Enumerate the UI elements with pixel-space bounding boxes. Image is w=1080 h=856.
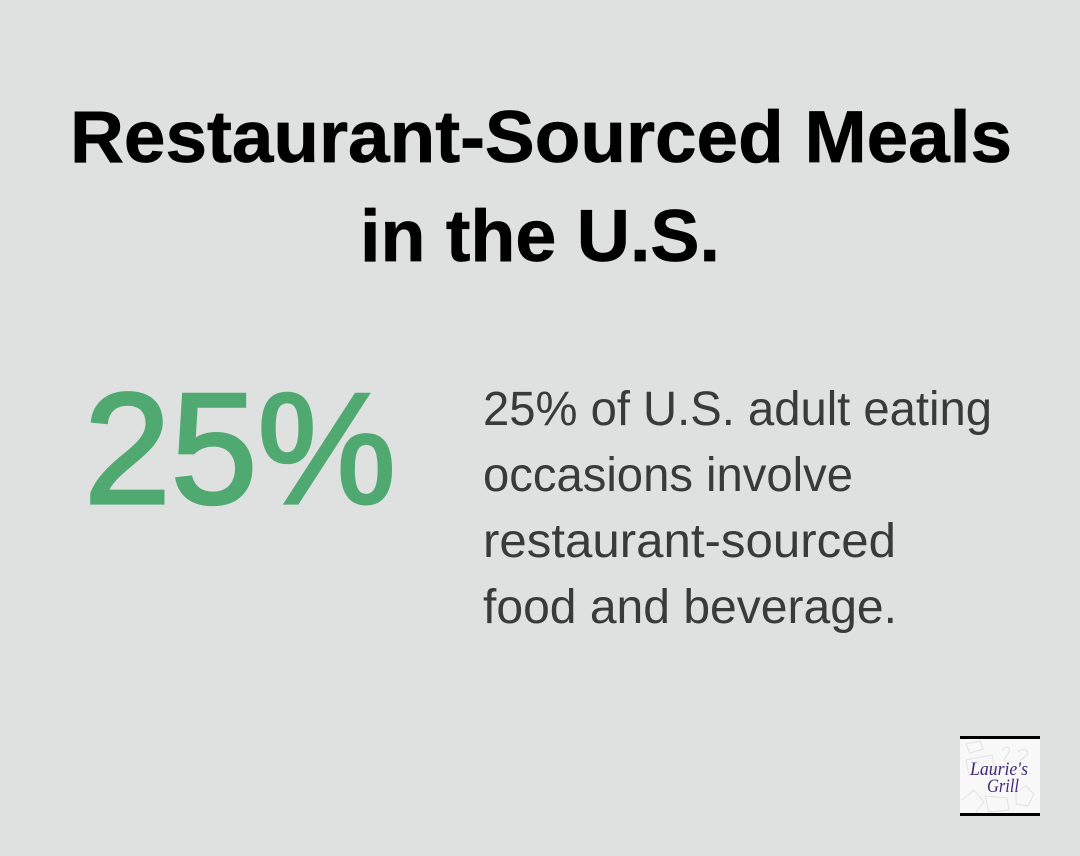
title: in the U.S.	[360, 196, 720, 277]
description text: 25% of U.S. adult eating	[483, 383, 992, 436]
big statistic: 25%: 25%	[84, 361, 396, 537]
logo: Laurie's Grill: Laurie's	[969, 759, 1028, 780]
logo: Laurie's Grill	[960, 736, 1040, 816]
title	[70, 97, 1012, 277]
description text: restaurant-sourced	[483, 515, 896, 568]
title: Restaurant-Sourced Meals	[70, 97, 1012, 178]
description text: food and beverage.	[483, 581, 897, 634]
description text: occasions involve	[483, 449, 853, 502]
logo: Laurie's Grill: Grill	[987, 776, 1019, 797]
description text	[483, 383, 992, 634]
